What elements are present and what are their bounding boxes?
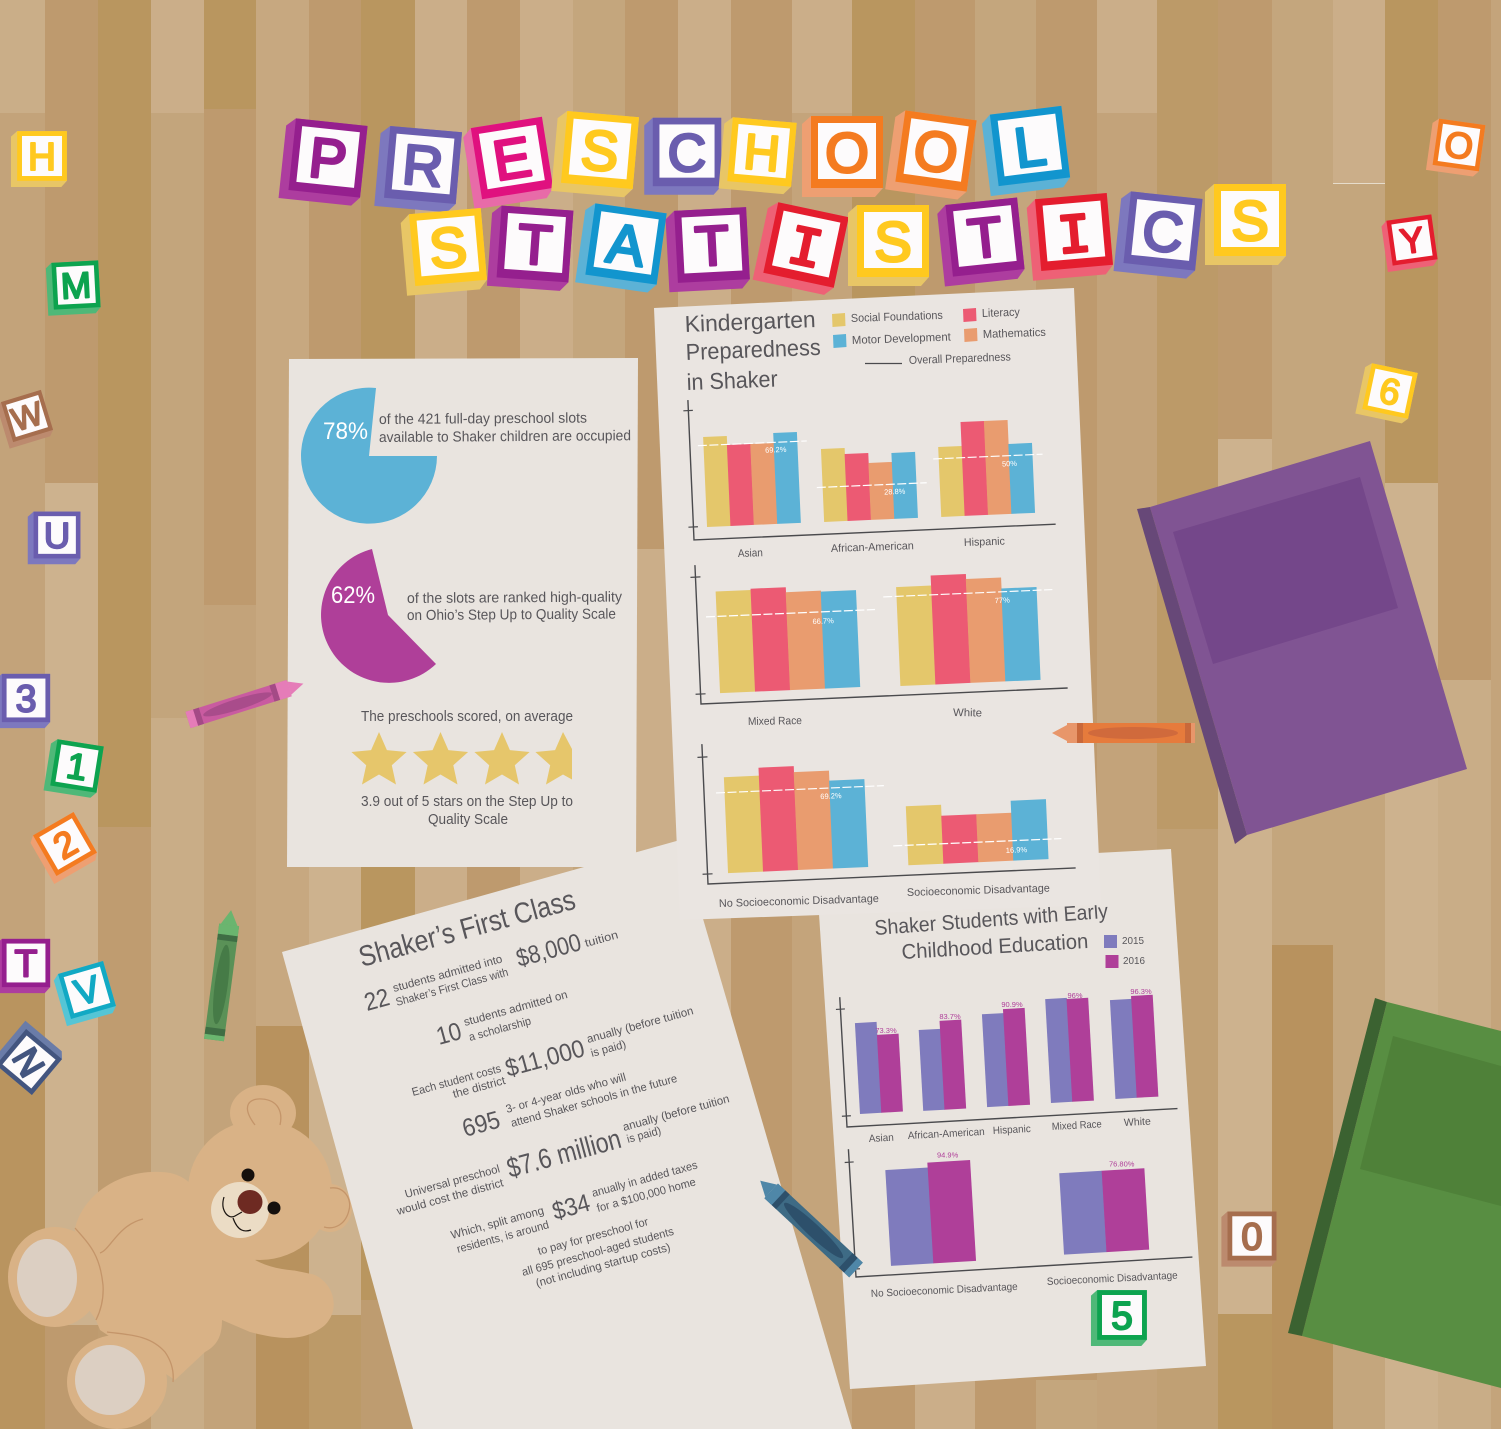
block: S: S [579, 117, 621, 184]
bar chart: socioeconomic status [697, 728, 1076, 884]
legend: preparedness categories: Overall Preparedness [909, 351, 1011, 367]
stat: $11,000 per student: Each student costs [411, 1063, 503, 1099]
heading: Shaker Students with Early Childhood Education: Shaker Students with Early [874, 900, 1109, 940]
stat: $11,000 per student: the district [452, 1075, 508, 1101]
block: I [753, 200, 849, 297]
axis labels: education by race: White [1124, 1116, 1151, 1129]
teddy bear [8, 1085, 352, 1429]
value labels: education by race: 73.3% [875, 1026, 897, 1035]
stat: $11,000 per student: anually (before tuition [586, 1005, 695, 1046]
text: high-quality slots: of the slots are ranked high-quality [407, 589, 623, 607]
stat: 10 scholarships [433, 989, 569, 1051]
block: S [551, 110, 639, 198]
text: slots occupied [379, 411, 631, 446]
bar chart: Mixed Race, White: 77% [995, 595, 1010, 605]
block: H [719, 117, 797, 195]
title: PRESCHOOL STATISTICS letter blocks [279, 106, 1286, 297]
text: high-quality slots [407, 589, 623, 624]
crayon: blue [753, 1173, 863, 1277]
text: slots occupied: of the 421 full-day preschool slots [379, 411, 587, 428]
stat: $34 in taxes: Which, split among [450, 1205, 545, 1242]
block: 6 [1355, 362, 1418, 424]
text: high-quality slots: on Ohio’s Step Up to Quality Scale [407, 607, 616, 624]
value labels: education by race: 96% [1067, 991, 1083, 1000]
block: S: S [1231, 189, 1269, 252]
stat: 10 scholarships: students admitted on [463, 989, 569, 1029]
block: S [1205, 184, 1286, 265]
block: L: L [1011, 113, 1049, 180]
legend: years [1104, 935, 1145, 968]
heading: Kindergarten Preparedness in Shaker: Preparedness [685, 334, 821, 365]
legend: years: 2015 [1122, 935, 1144, 947]
pie chart: 62% [321, 549, 436, 683]
pie chart: 78%: 78% [323, 418, 368, 445]
stat: 695 children: attend Shaker schools in the future [510, 1073, 679, 1130]
stat: $7.6 million [395, 1093, 731, 1218]
heading: Shaker Students with Early Childhood Education [874, 900, 1109, 964]
block: M: M [60, 264, 92, 307]
value labels and axis labels: education by socioeconomic status: No Socioeconomic Disadvantage [871, 1281, 1018, 1300]
stat: $7.6 million: anually (before tuition [622, 1093, 731, 1134]
block: O [802, 116, 883, 197]
axis labels: third chart [719, 883, 1050, 910]
bar chart: Mixed Race, White: 66.7% [812, 616, 834, 626]
bar chart: Asian, African-American, Hispanic: 50% [1002, 459, 1018, 468]
bar chart: education by race [835, 979, 1177, 1127]
axis labels: first chart [738, 536, 1006, 560]
block: 3 [0, 674, 50, 728]
axis labels: third chart: No Socioeconomic Disadvantage [719, 893, 879, 910]
value labels: education by race: 83.7% [939, 1012, 961, 1021]
block: C: C [1140, 198, 1186, 265]
block: T: T [15, 942, 38, 984]
heading: Shaker Students with Early Childhood Education: Childhood Education [901, 930, 1089, 964]
stat: $7.6 million: $7.6 million [503, 1123, 624, 1184]
stat: 22 students: students admitted into [392, 954, 504, 995]
text: closing note: all 695 preschool-aged students [521, 1226, 675, 1279]
block: N [0, 1021, 66, 1096]
stat: $11,000 per student: $11,000 [502, 1034, 588, 1083]
block: R: R [400, 132, 446, 199]
block: T: T [516, 212, 554, 277]
heading: Kindergarten Preparedness in Shaker: Kindergarten [684, 306, 816, 337]
block: C [644, 118, 721, 195]
text: closing note: (not including startup costs) [535, 1242, 672, 1290]
stat: 22 students [361, 928, 620, 1017]
stat: 10 scholarships: 10 [433, 1017, 465, 1051]
block: O: O [910, 117, 962, 186]
block: M [46, 260, 101, 316]
block: O [885, 109, 977, 201]
block: P: P [306, 125, 350, 192]
text: slots occupied: available to Shaker children are occupied [379, 428, 631, 446]
legend: preparedness categories: Social Foundations [851, 310, 943, 325]
heading: Kindergarten Preparedness in Shaker [684, 306, 821, 395]
value labels: education by race: 90.9% [1001, 1000, 1023, 1009]
crayon: pink [185, 676, 306, 728]
axis labels: education by race: Asian [869, 1132, 894, 1145]
crayon: orange [1052, 723, 1195, 743]
pie chart: 78% [301, 388, 437, 524]
text: star score: 3.9 out of 5 stars on the Step Up to [361, 794, 573, 810]
text: closing note: to pay for preschool for [537, 1216, 650, 1258]
heading: Kindergarten Preparedness in Shaker: in Shaker [686, 366, 778, 395]
block: S: S [427, 214, 469, 281]
stat: 22 students: tuition [584, 929, 620, 950]
purple book [1137, 441, 1467, 844]
bar chart: socioeconomic status: 69.2% [820, 791, 842, 801]
legend: preparedness categories: Motor Development [852, 332, 952, 347]
axis labels: second chart [748, 707, 982, 728]
value labels and axis labels: education by socioeconomic status: 76.80% [1109, 1160, 1135, 1168]
panel: preschool slots sheet [287, 358, 638, 867]
block: 0: 0 [1241, 1217, 1263, 1259]
axis labels: first chart: Hispanic [964, 536, 1006, 549]
block: L [981, 106, 1071, 196]
block: Y: Y [1398, 220, 1427, 262]
stat: $34 in taxes: residents, is around [456, 1219, 550, 1256]
stat: $34 in taxes: anually in added taxes [591, 1159, 699, 1200]
axis labels: education by race: Mixed Race [1052, 1118, 1102, 1133]
block: U: U [44, 515, 70, 556]
axis labels: first chart: Asian [738, 547, 763, 560]
block: 1: 1 [64, 745, 90, 788]
block: V [52, 961, 118, 1026]
block: 5: 5 [1111, 1295, 1133, 1338]
block: C [1114, 190, 1203, 280]
block: P [279, 117, 368, 207]
block: S [400, 208, 488, 296]
block: A [575, 202, 667, 294]
block: T: T [965, 204, 1005, 271]
block: H: H [28, 136, 56, 179]
green book [1288, 998, 1501, 1388]
block: H: H [742, 123, 782, 182]
stat: $11,000 per student: is paid) [590, 1039, 628, 1060]
block: E [462, 117, 555, 209]
block: R [374, 125, 462, 213]
block: O: O [1442, 123, 1476, 168]
block: T [0, 939, 50, 993]
block: I [1026, 193, 1114, 281]
block: T [665, 207, 750, 292]
block: 2: 2 [46, 822, 84, 867]
panel: Kindergarten Preparedness sheet [654, 288, 1101, 920]
block: H [11, 131, 67, 187]
text: average score intro: The preschools scored, on average [361, 709, 573, 725]
axis labels: second chart: Mixed Race [748, 715, 802, 728]
value labels and axis labels: education by socioeconomic status [871, 1150, 1178, 1300]
block: U [28, 512, 80, 564]
stat: $34 in taxes: for a $100,000 home [596, 1176, 697, 1215]
bar chart: Asian, African-American, Hispanic [683, 384, 1056, 540]
block: V: V [70, 967, 105, 1014]
block: 6: 6 [1376, 369, 1404, 414]
block: S [848, 205, 929, 286]
heading: Shaker's First Class: Shaker’s First Class [355, 884, 579, 974]
stat: 22 students: Shaker’s First Class with [395, 967, 510, 1009]
block: O [1426, 118, 1485, 177]
axis labels: education by race [869, 1116, 1151, 1145]
stat: $7.6 million: is paid) [626, 1125, 663, 1146]
stat: 695 children: 3- or 4-year olds who will [505, 1072, 627, 1116]
block: E: E [489, 124, 535, 193]
block: T [936, 197, 1026, 286]
text: star score: Quality Scale [428, 812, 508, 828]
stat: $7.6 million: Universal preschool [404, 1163, 501, 1201]
axis labels: third chart: Socioeconomic Disadvantage [907, 883, 1050, 899]
block: S: S [874, 210, 912, 273]
block: N: N [4, 1041, 53, 1084]
bar chart: Mixed Race, White [690, 549, 1068, 704]
stat: 695 children [459, 1072, 679, 1143]
block: 2 [28, 812, 100, 884]
block: 0 [1221, 1212, 1276, 1267]
block: 3: 3 [16, 677, 36, 719]
legend: preparedness categories [832, 307, 1046, 367]
value labels: education by race: 96.3% [1130, 987, 1152, 996]
legend: preparedness categories: Literacy [982, 307, 1020, 320]
stat: $34 in taxes [450, 1159, 699, 1256]
value labels: education by race [875, 987, 1152, 1035]
axis labels: education by race: African-American [908, 1126, 985, 1142]
axis labels: first chart: African-American [831, 540, 914, 555]
axis labels: second chart: White [953, 707, 982, 720]
stat: $11,000 per student [411, 1005, 695, 1101]
stat: 22 students: $8,000 [513, 928, 584, 973]
block: T: T [693, 213, 731, 278]
stat: 22 students: 22 [361, 983, 393, 1017]
bar chart: Asian, African-American, Hispanic: 28.8% [884, 487, 906, 497]
panel: Shaker's First Class sheet [282, 840, 852, 1429]
legend: years: 2016 [1123, 955, 1145, 967]
value labels and axis labels: education by socioeconomic status: 94.9% [937, 1150, 959, 1160]
stat: $34 in taxes: $34 [549, 1189, 593, 1226]
block: W: W [7, 395, 47, 438]
block: W [0, 390, 55, 449]
legend: preparedness categories: Mathematics [983, 327, 1046, 341]
block: T [487, 205, 573, 291]
bar chart: Asian, African-American, Hispanic: 69.2% [765, 445, 787, 455]
value labels and axis labels: education by socioeconomic status: Socioeconomic Disadvantage [1047, 1270, 1178, 1288]
block: I: I [1055, 204, 1094, 270]
bar chart: socioeconomic status: 16.9% [1006, 845, 1028, 855]
stat: $7.6 million: would cost the district [395, 1177, 506, 1218]
stat: 10 scholarships: a scholarship [468, 1015, 533, 1044]
block: 1 [44, 738, 104, 799]
bar chart: education by socioeconomic status [844, 1129, 1192, 1277]
block: 5 [1091, 1290, 1147, 1346]
block: A: A [603, 211, 649, 278]
star rating [351, 732, 572, 784]
stat: 695 children: 695 [459, 1106, 503, 1143]
crayon: green [204, 909, 241, 1041]
block: I: I [782, 215, 828, 285]
block: C: C [668, 124, 706, 183]
panel: early childhood education sheet [816, 849, 1206, 1389]
pie chart: 62%: 62% [331, 582, 375, 609]
text: star score [361, 794, 573, 828]
block: Y [1381, 214, 1438, 272]
axis labels: education by race: Hispanic [993, 1123, 1031, 1137]
block: O: O [825, 121, 869, 184]
